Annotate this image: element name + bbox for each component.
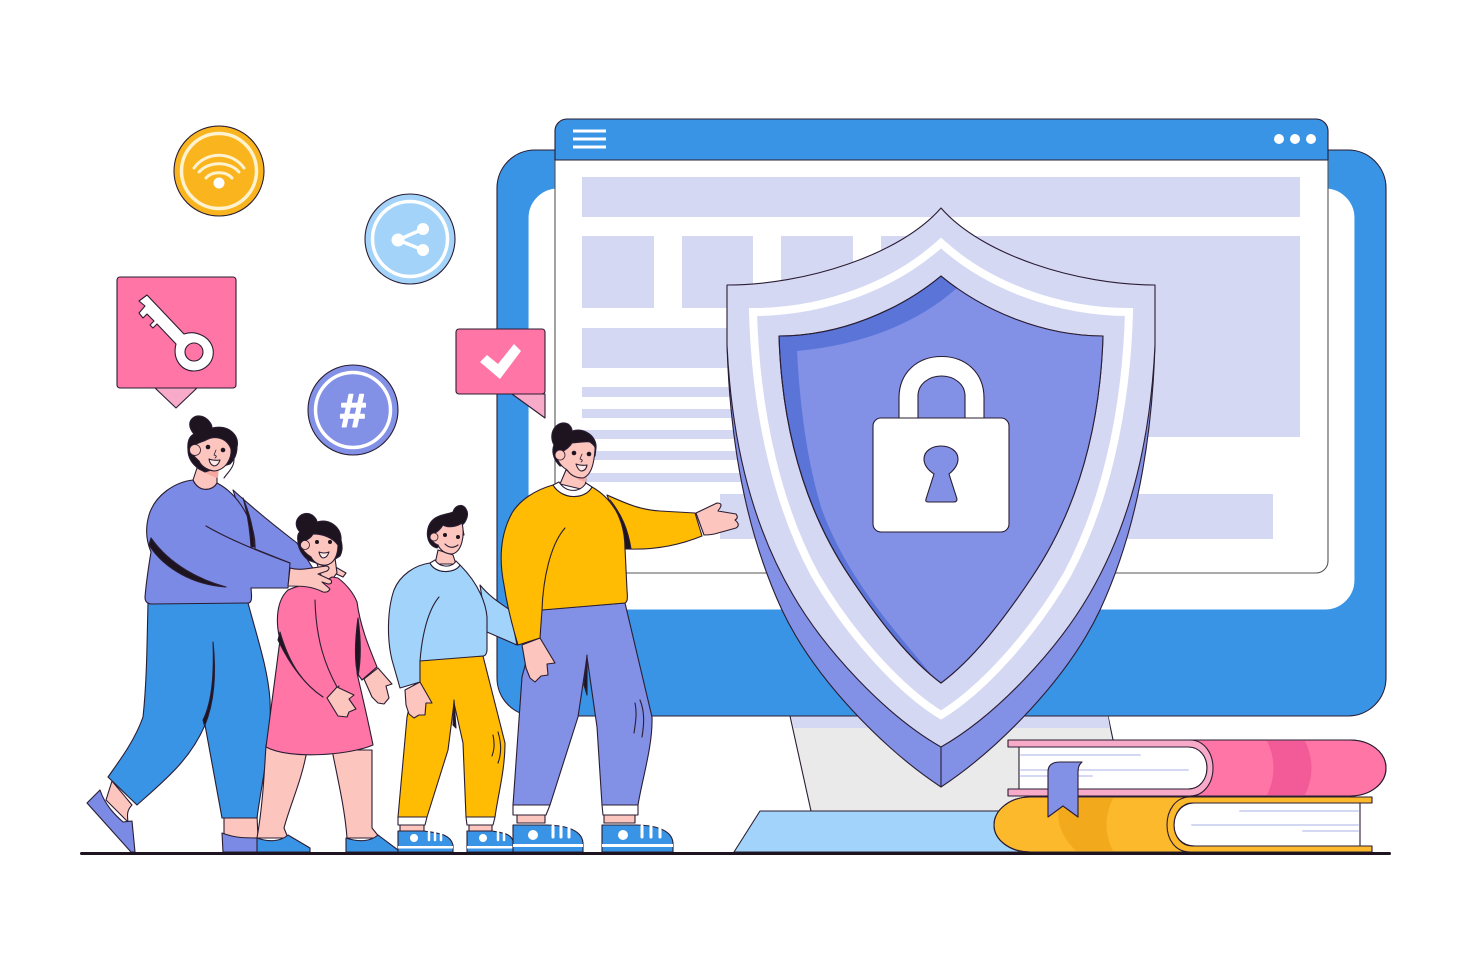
ground line: [80, 852, 1391, 855]
legs: [257, 745, 307, 838]
neck: [435, 550, 456, 564]
books: [994, 740, 1386, 852]
bookmark: [1048, 762, 1082, 817]
neck: [193, 465, 217, 489]
icon: hamburger menu: [573, 131, 606, 147]
dress: [266, 577, 377, 755]
neck: [560, 470, 586, 490]
person: boy in light blue sweater: [388, 505, 517, 852]
person: girl in pink dress: [257, 513, 398, 852]
far fingers: [332, 565, 346, 577]
cuffs and ankles: [513, 805, 550, 815]
monitor stand: [734, 716, 1128, 852]
monitor: [497, 150, 1386, 716]
outstretched arm: [480, 585, 517, 645]
pink book: [1008, 740, 1386, 796]
icon: share badge: [365, 194, 455, 284]
yellow book: [994, 797, 1372, 852]
icon: window dots: [1274, 134, 1316, 144]
icon: wifi badge: [174, 126, 264, 216]
right shoe: [467, 831, 514, 852]
left shoe: [398, 831, 453, 852]
shield: [727, 208, 1155, 787]
hair: [552, 423, 596, 466]
person: woman in blue trousers: [87, 416, 314, 852]
trousers: [513, 603, 652, 805]
shoes: [257, 835, 310, 852]
shield white band: [753, 243, 1129, 715]
hair: [188, 416, 237, 472]
near hand: [327, 687, 356, 717]
pointing arm: [607, 495, 702, 549]
neck: [315, 558, 337, 582]
far arm: [233, 490, 314, 580]
cuffs and ankles: [398, 817, 427, 825]
shield inner face: [779, 276, 1103, 683]
hair: [296, 513, 342, 566]
left foot and shoe: [106, 781, 132, 822]
sweater: [388, 563, 487, 688]
woman's hand on girl's shoulder: [288, 566, 332, 592]
face: [300, 534, 338, 565]
icon: hash badge: #: [340, 384, 366, 437]
page content blocks: [582, 177, 1300, 539]
hair: [427, 505, 467, 548]
face: [431, 523, 463, 554]
hanging hand: [522, 638, 555, 682]
hand: [405, 682, 432, 718]
icon: hash badge: [308, 365, 398, 455]
sweater: [501, 485, 627, 645]
face: [556, 442, 595, 478]
right foot and shoe: [224, 815, 258, 838]
face: [190, 438, 231, 471]
icon: check speech bubble: [456, 329, 545, 418]
browser window: [555, 119, 1328, 573]
sweater: [145, 480, 290, 604]
person: woman in yellow sweater: [501, 423, 738, 852]
left shoe: [513, 825, 583, 852]
icon: key: [139, 295, 213, 371]
right shoe: [602, 825, 673, 852]
trousers: [398, 656, 505, 817]
pointing hand: [696, 503, 738, 535]
icon: key speech bubble: [117, 277, 236, 408]
far hand: [364, 668, 392, 704]
icon: padlock: [873, 356, 1009, 532]
trousers: [108, 603, 270, 818]
